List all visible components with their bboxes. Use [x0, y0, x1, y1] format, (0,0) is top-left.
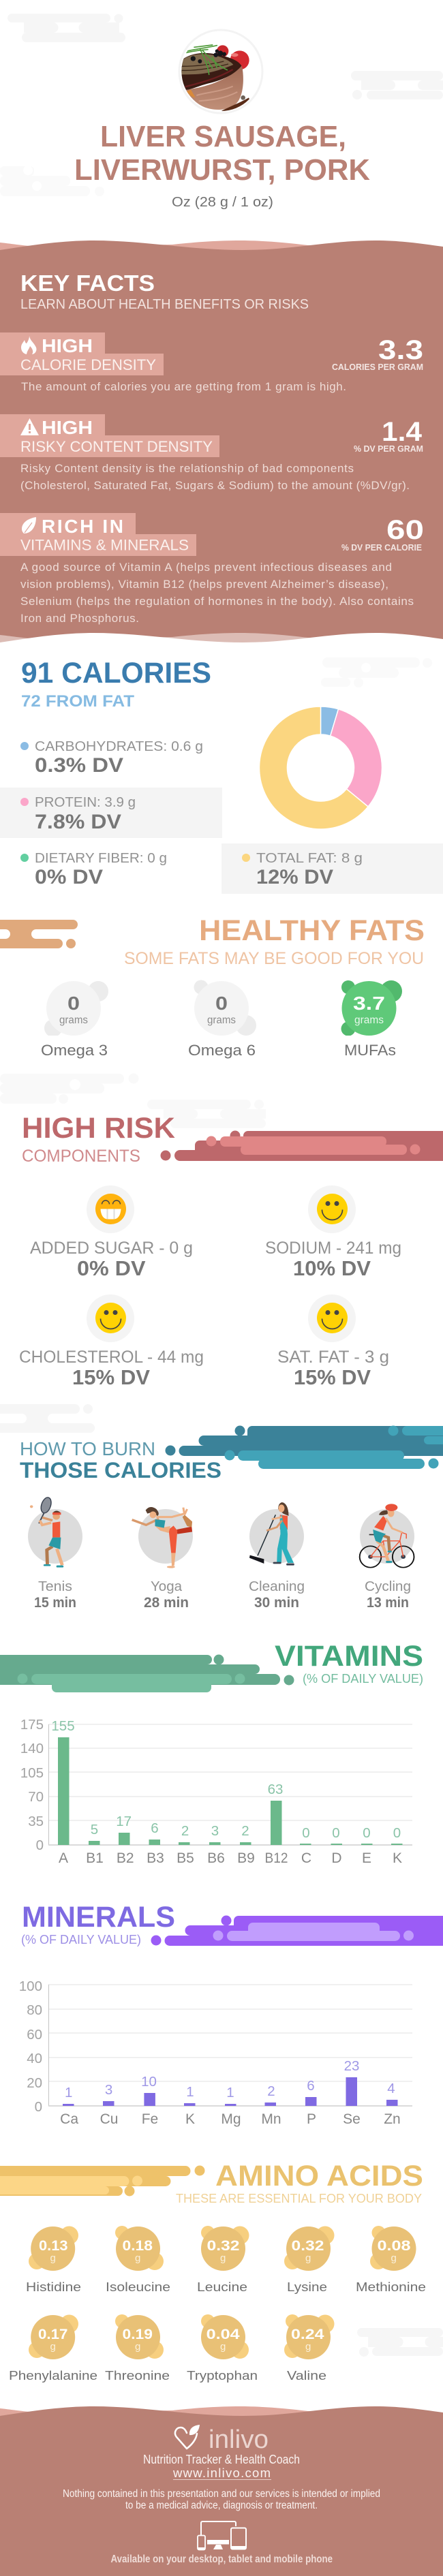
heading: amino acids: AMINO ACIDS: [215, 2160, 423, 2192]
bar chart: vitamins: 0: [363, 1825, 371, 1841]
bar chart: minerals: Zn: [384, 2111, 401, 2127]
disclaimer: to be a medical advice, diagnosis or treatment.: [125, 2500, 318, 2511]
subheading: components: COMPONENTS: [22, 1147, 140, 1166]
fact: rich in vitamins and minerals: RICH IN: [42, 516, 123, 537]
amino: tryptophan: g: [220, 2341, 226, 2353]
component: added sugar: ADDED SUGAR - 0 g: [30, 1239, 193, 1258]
legend: carbohydrates: CARBOHYDRATES: 0.6 g: [35, 739, 203, 754]
bar chart: vitamins: 0: [393, 1825, 401, 1841]
bar chart: vitamins: B5: [177, 1850, 194, 1866]
serving size: Oz (28 g / 1 oz): [172, 194, 273, 210]
bar chart: vitamins: 0: [302, 1825, 310, 1841]
legend: protein: [20, 794, 136, 833]
website link: www.inlivo.com: [172, 2466, 271, 2480]
amino: phenylalanine: 0.17: [38, 2326, 68, 2342]
heading: healthy fats: HEALTHY FATS: [199, 914, 425, 947]
component: added sugar: [30, 1185, 193, 1280]
bar chart: minerals: Mn: [261, 2111, 281, 2127]
component: cholesterol: CHOLESTEROL - 44 mg: [19, 1348, 204, 1367]
legend: carbohydrates: [20, 739, 203, 777]
component: cholesterol: [19, 1294, 204, 1389]
subheading: from fat: 72 FROM FAT: [21, 692, 134, 711]
subheading: daily value: (% OF DAILY VALUE): [21, 1932, 141, 1946]
legend: carbohydrates: 0.3% DV: [35, 754, 123, 777]
panel: key facts: [0, 240, 443, 649]
background cloud: amino: [357, 2328, 443, 2357]
icon: person sweeping: [249, 1502, 294, 1566]
activity: yoga: 28 min: [144, 1595, 189, 1611]
activity: tennis: 15 min: [34, 1595, 76, 1611]
icon: smiley: [95, 1303, 126, 1333]
title: LIVER SAUSAGE,: [100, 120, 346, 153]
bar chart: vitamins: 6: [151, 1820, 159, 1836]
tagline: Nutrition Tracker & Health Coach: [143, 2453, 300, 2466]
amino: methionine: Methionine: [356, 2280, 426, 2294]
heading: minerals: MINERALS: [22, 1901, 175, 1934]
heading: high risk: HIGH RISK: [22, 1112, 175, 1145]
bar chart: minerals: 3: [105, 2082, 112, 2098]
icon: tennis player: [30, 1497, 63, 1568]
stat: mufas: [341, 980, 402, 1059]
stat: omega 3: [41, 981, 108, 1059]
heading: how to burn: HOW TO BURN: [20, 1438, 155, 1459]
amino: threonine: g: [135, 2341, 140, 2353]
fact: risky content density: [0, 414, 423, 492]
amino: threonine: [105, 2314, 170, 2383]
component: sodium: SODIUM - 241 mg: [265, 1239, 401, 1258]
amino: isoleucine: g: [135, 2252, 140, 2264]
amino: histidine: g: [50, 2252, 56, 2264]
activity: tennis: Tenis: [38, 1579, 72, 1594]
subheading: LEARN ABOUT HEALTH BENEFITS OR RISKS: [20, 297, 309, 312]
bar chart: vitamins: 63: [268, 1782, 283, 1797]
icon: smiley: [317, 1303, 348, 1333]
decorative shape: green bars: [0, 1654, 294, 1692]
activity: cleaning: 30 min: [254, 1595, 299, 1611]
amino: threonine: Threonine: [105, 2368, 170, 2383]
bar chart: vitamins: [20, 1717, 412, 1866]
fact: rich in vitamins and minerals: 60: [386, 515, 424, 545]
stat: mufas: MUFAs: [344, 1042, 396, 1059]
fact: risky content density: (Cholesterol, Saturated Fat, Sugars & Sodium) to the amount (%DV/gr).: [20, 479, 410, 492]
bar chart: minerals: 0: [35, 2099, 42, 2115]
legend: total fat: TOTAL FAT: 8 g: [256, 850, 363, 866]
background clouds: header: [7, 14, 443, 99]
amino: valine: Valine: [287, 2368, 326, 2383]
amino: valine: g: [305, 2341, 311, 2353]
component: sodium: 10% DV: [293, 1256, 371, 1280]
stat: omega 6: grams: [207, 1014, 236, 1026]
component: cholesterol: 15% DV: [72, 1365, 150, 1389]
bar chart: minerals: P: [307, 2111, 316, 2127]
heading: calories: 91 CALORIES: [21, 657, 211, 689]
donut chart: [259, 707, 382, 829]
activity: cleaning: Cleaning: [249, 1579, 305, 1594]
amino: valine: 0.24: [291, 2326, 324, 2342]
bar chart: vitamins: 5: [91, 1822, 98, 1837]
legend: protein: PROTEIN: 3.9 g: [35, 794, 136, 810]
icon: cyclist: [360, 1504, 414, 1568]
stat: mufas: 3.7: [353, 993, 385, 1014]
bar chart: vitamins: E: [362, 1850, 371, 1866]
activity: tennis: [28, 1497, 82, 1611]
background cloud: calories: [321, 657, 432, 687]
amino: leucine: 0.32: [207, 2237, 240, 2254]
amino: methionine: 0.08: [378, 2237, 411, 2254]
fact: rich in vitamins and minerals: A good source of Vitamin A (helps prevent infectious diseases and: [20, 561, 392, 574]
disclaimer: [63, 2488, 380, 2511]
stat: omega 3: grams: [59, 1014, 88, 1026]
fact: rich in vitamins and minerals: vision problems), Vitamin B12 (helps prevent Alzheimer’s disease),: [20, 578, 388, 591]
activity: cleaning: [249, 1502, 305, 1611]
bar chart: minerals: 80: [27, 2002, 42, 2018]
disclaimer: Nothing contained in this presentation and our services is intended or implied: [63, 2488, 380, 2500]
bar chart: minerals: 23: [344, 2058, 359, 2074]
icon: warning triangle: [20, 418, 39, 435]
icon: devices: [198, 2521, 246, 2550]
bar chart: minerals: Se: [343, 2111, 361, 2127]
fact: calorie density: [0, 332, 423, 393]
fact: risky content density: % DV PER GRAM: [354, 444, 423, 454]
fact: rich in vitamins and minerals: VITAMINS & MINERALS: [20, 537, 189, 553]
legend: total fat: [242, 850, 363, 888]
icon: yoga figure: [132, 1507, 192, 1568]
bar chart: vitamins: 3: [211, 1823, 219, 1839]
amino: lysine: g: [305, 2252, 311, 2264]
bar chart: vitamins: 105: [20, 1765, 44, 1781]
bar chart: vitamins: A: [59, 1850, 68, 1866]
activity: yoga: Yoga: [151, 1579, 183, 1594]
amino: leucine: Leucine: [197, 2280, 247, 2294]
bar chart: minerals: 4: [387, 2081, 395, 2096]
bar chart: vitamins: 155: [51, 1718, 75, 1734]
food photo in ring: [179, 30, 262, 114]
icon: grinning face: [95, 1194, 126, 1224]
bar chart: minerals: Fe: [142, 2111, 158, 2127]
decorative shape: yellow bars: [0, 2165, 204, 2197]
decorative shape: teal bars: [165, 1425, 443, 1469]
bar chart: minerals: Ca: [60, 2111, 78, 2127]
fact: rich in vitamins and minerals: % DV PER CALORIE: [341, 542, 422, 553]
amino: tryptophan: 0.04: [207, 2326, 240, 2342]
background clouds: left of title: [0, 166, 104, 196]
fact: risky content density: HIGH: [42, 417, 93, 438]
panel: vitamins: [0, 1640, 423, 1866]
heading: vitamins: VITAMINS: [275, 1640, 423, 1673]
panel: healthy fats: [0, 914, 425, 1059]
stat: omega 3: 0: [67, 993, 80, 1014]
decorative shape: purple bars: [151, 1916, 443, 1946]
decorative shape: orange bars: [0, 920, 78, 948]
subheading: daily value: (% OF DAILY VALUE): [303, 1671, 423, 1686]
bar chart: vitamins: B2: [117, 1850, 134, 1866]
bar chart: vitamins: B3: [147, 1850, 164, 1866]
icon: flame: [21, 336, 36, 354]
panel: how to burn calories: [20, 1425, 443, 1611]
legend: protein: 7.8% DV: [35, 811, 121, 833]
bar chart: vitamins: D: [331, 1850, 342, 1866]
bar chart: minerals: 100: [19, 1978, 42, 1994]
background cloud: burn: [0, 1404, 95, 1433]
amino: lysine: 0.32: [292, 2237, 324, 2254]
legend: total fat: 12% DV: [256, 866, 333, 888]
stat: omega 3: Omega 3: [41, 1042, 108, 1059]
bar chart: minerals: 20: [27, 2075, 42, 2091]
amino: phenylalanine: g: [50, 2341, 56, 2353]
bar chart: vitamins: B6: [207, 1850, 225, 1866]
bar chart: minerals: [19, 1978, 412, 2127]
panel: footer: [0, 2406, 443, 2576]
bar chart: vitamins: K: [393, 1850, 402, 1866]
amino: phenylalanine: Phenylalanine: [9, 2368, 97, 2383]
stat: omega 6: [188, 980, 256, 1059]
bar chart: minerals: 6: [307, 2078, 315, 2094]
bar chart: vitamins: 70: [28, 1789, 44, 1805]
fact: calorie density: CALORIES PER GRAM: [332, 362, 423, 372]
activity: cycling: Cycling: [365, 1579, 411, 1594]
bar chart: minerals: 40: [27, 2051, 42, 2066]
fact: rich in vitamins and minerals: Iron and Phosphorus.: [20, 612, 139, 625]
bar chart: vitamins: 17: [116, 1814, 132, 1829]
activity: cycling: [360, 1504, 414, 1611]
fact: calorie density: HIGH: [42, 335, 93, 356]
bar chart: minerals: 1: [186, 2084, 194, 2100]
amino: threonine: 0.19: [123, 2326, 153, 2342]
fact: risky content density: RISKY CONTENT DENSITY: [20, 438, 213, 455]
fact: rich in vitamins and minerals: Selenium (helps the regulation of hormones in the body). Also contains: [20, 595, 414, 608]
amino: tryptophan: Tryptophan: [187, 2368, 258, 2383]
amino: tryptophan: [187, 2314, 258, 2383]
amino: leucine: [197, 2226, 249, 2294]
bar chart: vitamins: 140: [20, 1741, 44, 1756]
bar chart: minerals: Cu: [100, 2111, 118, 2127]
amino: leucine: g: [220, 2252, 226, 2264]
logo wordmark: inlivo: [209, 2425, 269, 2454]
fact: rich in vitamins and minerals: [0, 513, 424, 625]
component: saturated fat: 15% DV: [294, 1365, 371, 1389]
bar chart: minerals: 10: [141, 2074, 157, 2090]
activity: cycling: 13 min: [367, 1595, 409, 1611]
icon: leaf: [22, 517, 36, 533]
fact: risky content density: 1.4: [382, 417, 423, 447]
amino: histidine: Histidine: [26, 2280, 81, 2294]
component: added sugar: 0% DV: [77, 1256, 146, 1280]
heading: those calories: THOSE CALORIES: [20, 1458, 222, 1483]
panel: high risk components: [19, 1112, 443, 1389]
amino: valine: [284, 2314, 334, 2383]
amino: lysine: [284, 2226, 334, 2294]
bar chart: vitamins: 175: [20, 1717, 44, 1733]
icon: inlivo heart logo: [175, 2425, 200, 2449]
bar chart: minerals: 2: [267, 2083, 275, 2099]
icon: smiley: [317, 1194, 348, 1224]
bar chart: vitamins: B9: [237, 1850, 255, 1866]
amino: isoleucine: 0.18: [123, 2237, 153, 2254]
title: [74, 120, 370, 187]
fact: calorie density: CALORIE DENSITY: [20, 356, 156, 373]
availability note: Available on your desktop, tablet and mobile phone: [110, 2554, 333, 2565]
amino: isoleucine: Isoleucine: [106, 2280, 170, 2294]
amino: lysine: Lysine: [287, 2280, 327, 2294]
fact: calorie density: The amount of calories you are getting from 1 gram is high.: [21, 380, 346, 393]
bar chart: vitamins: 0: [332, 1825, 340, 1841]
component: saturated fat: SAT. FAT - 3 g: [277, 1348, 389, 1367]
legend: dietary fiber: 0% DV: [35, 866, 103, 888]
activity: yoga: [132, 1507, 193, 1611]
amino: histidine: [26, 2226, 81, 2294]
stat: mufas: grams: [354, 1014, 384, 1026]
panel: amino acids: [0, 2160, 443, 2383]
stat: omega 6: 0: [215, 993, 228, 1014]
bar chart: minerals: Mg: [221, 2111, 241, 2127]
decorative shape: red bars: [161, 1131, 443, 1161]
bar chart: vitamins: 2: [181, 1823, 189, 1839]
title: LIVERWURST, PORK: [74, 153, 370, 187]
amino: phenylalanine: [9, 2315, 97, 2383]
bar chart: vitamins: 2: [241, 1823, 249, 1839]
panel: minerals: [19, 1901, 443, 2127]
heading: key facts: KEY FACTS: [20, 270, 155, 296]
bar chart: minerals: 60: [27, 2027, 42, 2043]
fact: risky content density: Risky Content density is the relationship of bad components: [20, 462, 354, 475]
bar chart: vitamins: C: [301, 1850, 311, 1866]
legend: dietary fiber: DIETARY FIBER: 0 g: [35, 850, 167, 866]
background clouds: high risk: [0, 1074, 266, 1128]
stat: omega 6: Omega 6: [188, 1042, 256, 1059]
bar chart: vitamins: B1: [86, 1850, 104, 1866]
amino: methionine: g: [391, 2252, 397, 2264]
amino: isoleucine: [106, 2226, 170, 2294]
amino: methionine: [356, 2226, 426, 2294]
panel: calories: [0, 657, 443, 894]
legend: dietary fiber: [20, 850, 167, 888]
fact: calorie density: 3.3: [378, 335, 423, 365]
bar chart: minerals: K: [185, 2111, 195, 2127]
subheading: THESE ARE ESSENTIAL FOR YOUR BODY: [176, 2191, 422, 2205]
component: saturated fat: [277, 1294, 389, 1389]
component: sodium: [265, 1185, 401, 1280]
bar chart: vitamins: 35: [28, 1814, 44, 1829]
bar chart: minerals: 1: [65, 2085, 72, 2100]
amino: histidine: 0.13: [39, 2237, 68, 2254]
subheading: SOME FATS MAY BE GOOD FOR YOU: [124, 949, 424, 968]
bar chart: vitamins: 0: [36, 1837, 44, 1853]
bar chart: minerals: 1: [226, 2085, 234, 2100]
bar chart: vitamins: B12: [264, 1850, 288, 1866]
